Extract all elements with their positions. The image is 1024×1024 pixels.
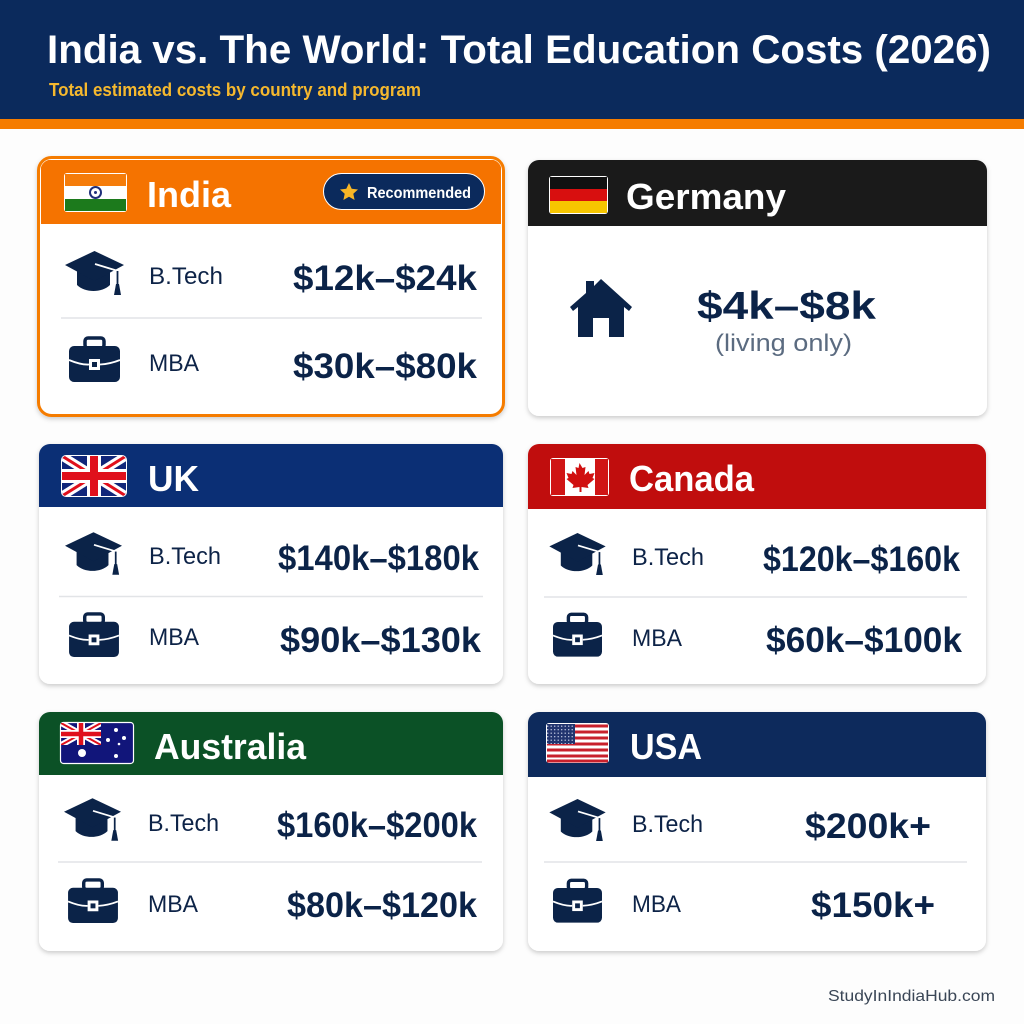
panel: Germany bbox=[528, 160, 987, 416]
row: B.Tech bbox=[549, 533, 960, 579]
heading: UK: UK bbox=[148, 458, 199, 499]
title: India vs. The World: Total Education Costs (2026) bbox=[47, 28, 991, 72]
row: MBA: $60k–$100k bbox=[766, 621, 963, 660]
row: B.Tech: $200k+ bbox=[805, 807, 931, 846]
icon: house bbox=[570, 279, 632, 337]
row: B.Tech: B.Tech bbox=[149, 263, 223, 290]
icon: Australia flag bbox=[60, 722, 134, 764]
icon: Germany flag bbox=[549, 176, 608, 214]
row: B.Tech: B.Tech bbox=[148, 810, 219, 837]
row: MBA: MBA bbox=[149, 624, 199, 651]
note: living only: (living only) bbox=[715, 330, 852, 357]
icon: UK flag bbox=[61, 455, 127, 497]
row: B.Tech bbox=[65, 251, 478, 298]
row: B.Tech bbox=[549, 799, 931, 846]
row: B.Tech bbox=[65, 532, 479, 578]
row: MBA bbox=[68, 880, 478, 925]
panel: India bbox=[38, 158, 504, 416]
row: B.Tech: B.Tech bbox=[632, 811, 703, 838]
heading: India: India bbox=[147, 174, 232, 215]
row: MBA: $30k–$80k bbox=[293, 347, 478, 386]
badge: recommended: Recommended bbox=[367, 185, 471, 202]
icon: India flag bbox=[64, 173, 127, 212]
row: B.Tech bbox=[64, 798, 477, 845]
footer credit: StudyInIndiaHub.com bbox=[828, 988, 995, 1005]
panel: Australia bbox=[39, 712, 503, 951]
price: Germany: $4k–$8k bbox=[697, 285, 876, 328]
row: MBA bbox=[553, 880, 935, 925]
row: B.Tech: B.Tech bbox=[149, 543, 221, 570]
row: B.Tech: $12k–$24k bbox=[293, 259, 478, 298]
heading: USA: USA bbox=[630, 726, 702, 767]
row: MBA bbox=[69, 614, 482, 660]
subtitle: Total estimated costs by country and program bbox=[49, 80, 421, 100]
row: B.Tech: B.Tech bbox=[632, 544, 704, 571]
row: MBA: MBA bbox=[148, 891, 198, 918]
row: MBA: MBA bbox=[632, 625, 682, 652]
heading: Australia: Australia bbox=[154, 726, 307, 767]
row: MBA: $150k+ bbox=[811, 886, 935, 925]
row: MBA: $90k–$130k bbox=[280, 621, 482, 660]
row: B.Tech: $160k–$200k bbox=[277, 806, 477, 845]
row: MBA: MBA bbox=[149, 350, 199, 377]
panel: UK bbox=[39, 444, 503, 684]
row: B.Tech: $140k–$180k bbox=[278, 539, 479, 578]
header banner bbox=[0, 0, 1024, 129]
icon: USA flag bbox=[546, 723, 609, 763]
row: MBA bbox=[553, 614, 963, 660]
panel: Canada bbox=[528, 444, 986, 684]
row: B.Tech: $120k–$160k bbox=[763, 540, 960, 579]
panel: USA bbox=[528, 712, 986, 951]
row: MBA: MBA bbox=[632, 891, 681, 918]
badge: recommended bbox=[324, 174, 484, 210]
row: MBA bbox=[69, 338, 478, 386]
heading: Germany: Germany bbox=[626, 176, 786, 217]
heading: Canada: Canada bbox=[629, 458, 755, 499]
icon: Canada flag bbox=[550, 458, 609, 496]
row: MBA: $80k–$120k bbox=[287, 886, 478, 925]
